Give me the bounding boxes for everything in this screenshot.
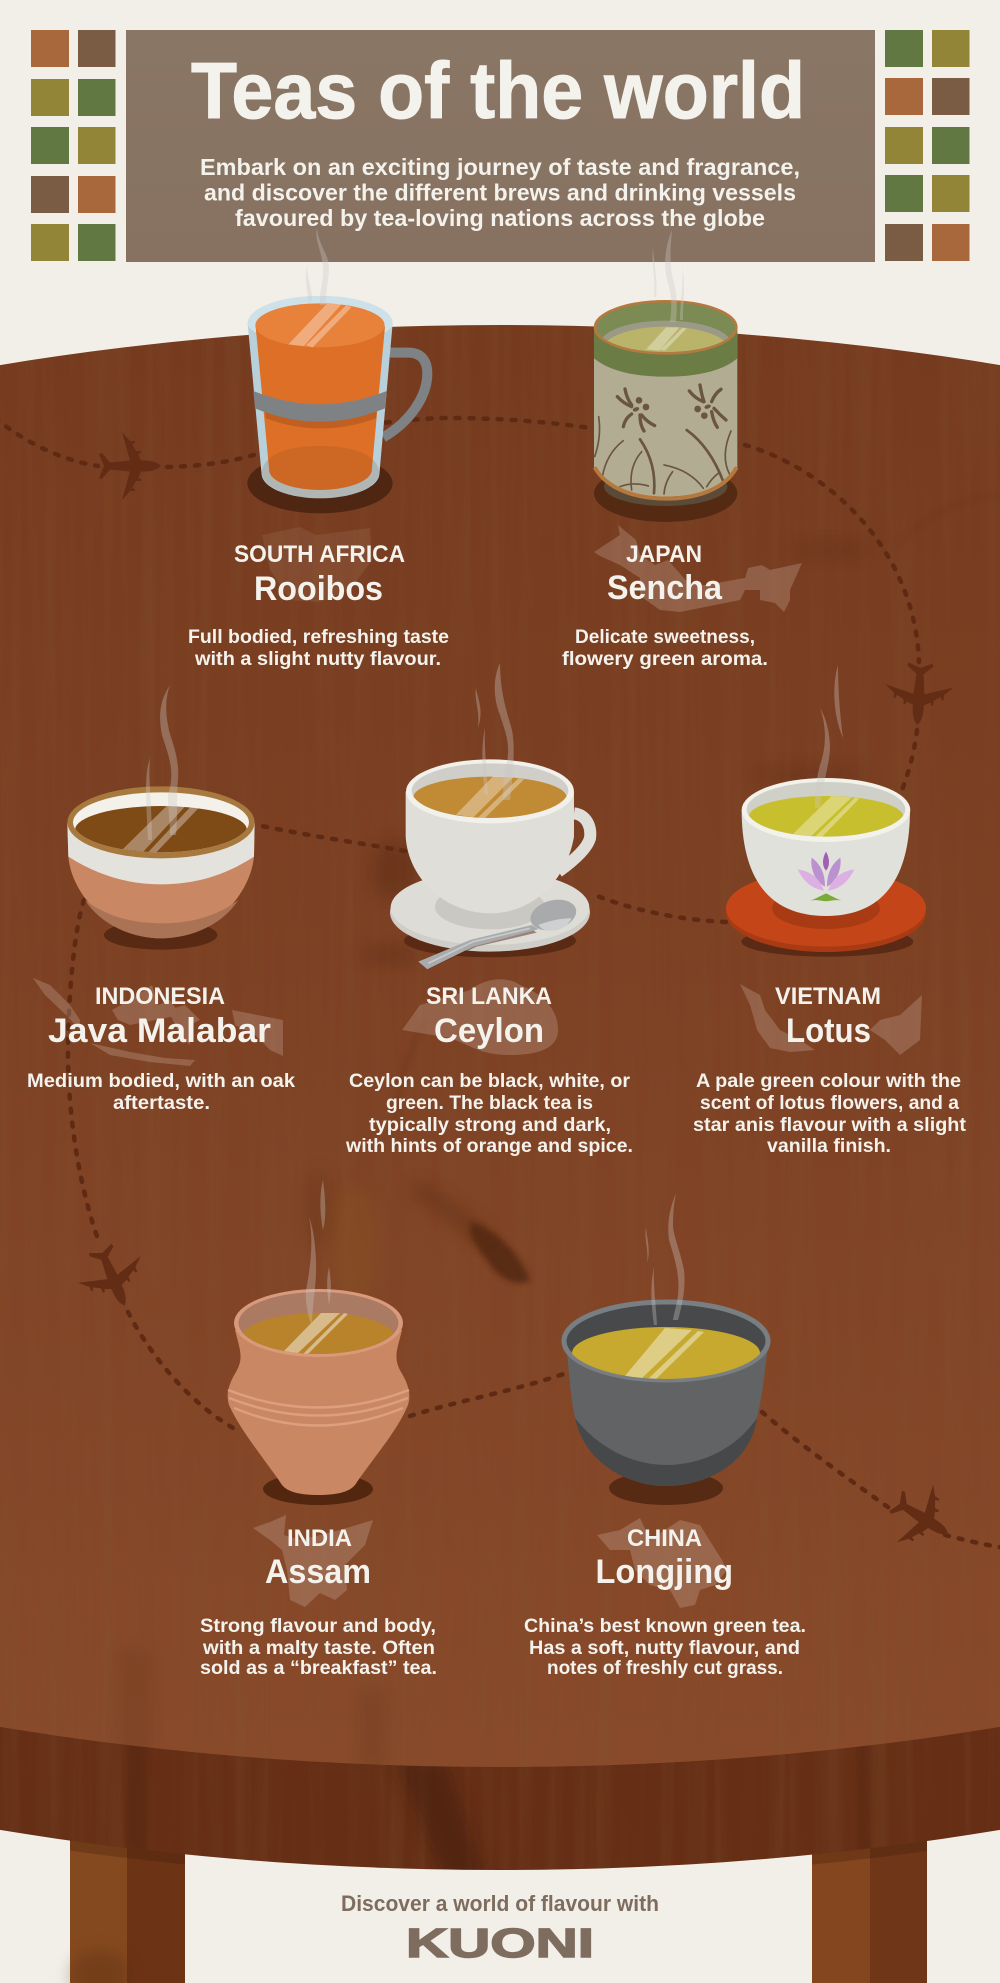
table top — [0, 320, 1000, 1770]
description: Ceylon can be black, white, or — [349, 1070, 630, 1092]
tea name: Longjing — [596, 1553, 733, 1591]
country label: VIETNAM — [775, 983, 881, 1010]
country label: INDIA — [287, 1525, 352, 1552]
tea name: Lotus — [786, 1012, 871, 1050]
description — [188, 626, 449, 670]
country label: JAPAN — [626, 541, 702, 568]
map: China — [597, 1518, 727, 1608]
map: South Africa — [262, 527, 372, 602]
icon: ceylon cup and saucer — [390, 759, 590, 970]
description: flowery green aroma. — [562, 648, 768, 670]
description: Full bodied, refreshing taste — [188, 626, 449, 648]
icon: sencha cup — [594, 301, 737, 522]
map: Indonesia — [33, 978, 283, 1066]
tea name: Java Malabar — [48, 1012, 271, 1050]
description: green. The black tea is — [386, 1092, 593, 1114]
description — [345, 1070, 633, 1157]
intro text: Embark on an exciting journey of taste and fragrance, — [200, 154, 800, 180]
panel: Sencha tea — [562, 230, 768, 670]
steam — [306, 1180, 331, 1325]
country label: CHINA — [627, 1525, 702, 1552]
description: notes of freshly cut grass. — [547, 1657, 783, 1679]
description: with hints of orange and spice. — [345, 1135, 633, 1157]
icon: rooibos glass — [247, 296, 427, 513]
tea name: Sencha — [607, 569, 723, 607]
description: Medium bodied, with an oak — [27, 1070, 295, 1092]
intro text: favoured by tea-loving nations across the globe — [235, 205, 765, 231]
panel: Assam tea — [200, 1180, 437, 1679]
icon: plane south-west — [69, 1235, 156, 1319]
icon: lotus bowl and saucer — [726, 778, 926, 957]
icon: grey iron cup — [564, 1302, 768, 1505]
country label: SOUTH AFRICA — [234, 541, 405, 568]
table legs — [62, 1840, 927, 1983]
description: with a malty taste. Often — [202, 1637, 435, 1659]
map: Sri Lanka — [402, 979, 558, 1055]
description: star anis flavour with a slight — [693, 1114, 967, 1136]
panel: Rooibos tea — [188, 228, 449, 670]
description — [27, 1070, 295, 1114]
header banner — [126, 30, 875, 262]
dotted flight route — [0, 418, 1000, 1548]
icon: lotus flower — [798, 852, 854, 901]
description: typically strong and dark, — [369, 1114, 611, 1136]
tea name: Rooibos — [254, 570, 383, 608]
panel: Java Malabar tea — [27, 685, 295, 1114]
description: sold as a “breakfast” tea. — [200, 1657, 437, 1679]
description — [562, 626, 768, 670]
header colour tiles left — [31, 30, 116, 261]
steam — [306, 228, 329, 305]
steam — [653, 230, 684, 322]
footer tagline: Discover a world of flavour with — [341, 1891, 659, 1916]
steam — [646, 1193, 685, 1325]
footer — [341, 1891, 659, 1966]
table rim — [0, 1726, 1000, 1870]
description — [524, 1615, 806, 1679]
description: vanilla finish. — [767, 1135, 891, 1157]
country label: SRI LANKA — [426, 983, 552, 1010]
description: Strong flavour and body, — [200, 1615, 436, 1637]
tea name: Ceylon — [434, 1012, 544, 1050]
description: scent of lotus flowers, and a — [700, 1092, 959, 1114]
description: A pale green colour with the — [696, 1070, 961, 1092]
country label: INDONESIA — [95, 983, 225, 1010]
title: Teas of the world — [191, 46, 805, 135]
panel: Ceylon tea — [345, 663, 633, 1157]
map: India — [253, 1515, 373, 1607]
description: with a slight nutty flavour. — [194, 648, 441, 670]
description: China’s best known green tea. — [524, 1615, 806, 1637]
panel: Lotus tea — [693, 665, 967, 1157]
intro text — [200, 154, 800, 231]
description: aftertaste. — [113, 1092, 210, 1114]
icon: java bowl — [67, 786, 255, 950]
intro text: and discover the different brews and drinking vessels — [204, 180, 796, 206]
steam — [476, 663, 514, 800]
steam — [815, 665, 843, 808]
description: Delicate sweetness, — [575, 626, 755, 648]
icon: plane south-east — [878, 1472, 966, 1563]
description — [693, 1070, 967, 1157]
map: Vietnam — [740, 984, 922, 1055]
icon: plane east — [883, 661, 955, 727]
description — [200, 1615, 437, 1679]
steam — [146, 685, 178, 840]
panel: Longjing tea — [524, 1193, 806, 1679]
map: Japan — [594, 525, 802, 612]
icon: plane west — [99, 432, 161, 500]
logo wordmark: KUONI — [406, 1920, 594, 1966]
icon: clay kulhad — [228, 1289, 409, 1505]
description: Has a soft, nutty flavour, and — [529, 1637, 800, 1659]
tea name: Assam — [265, 1553, 371, 1591]
header colour tiles right — [885, 30, 970, 261]
